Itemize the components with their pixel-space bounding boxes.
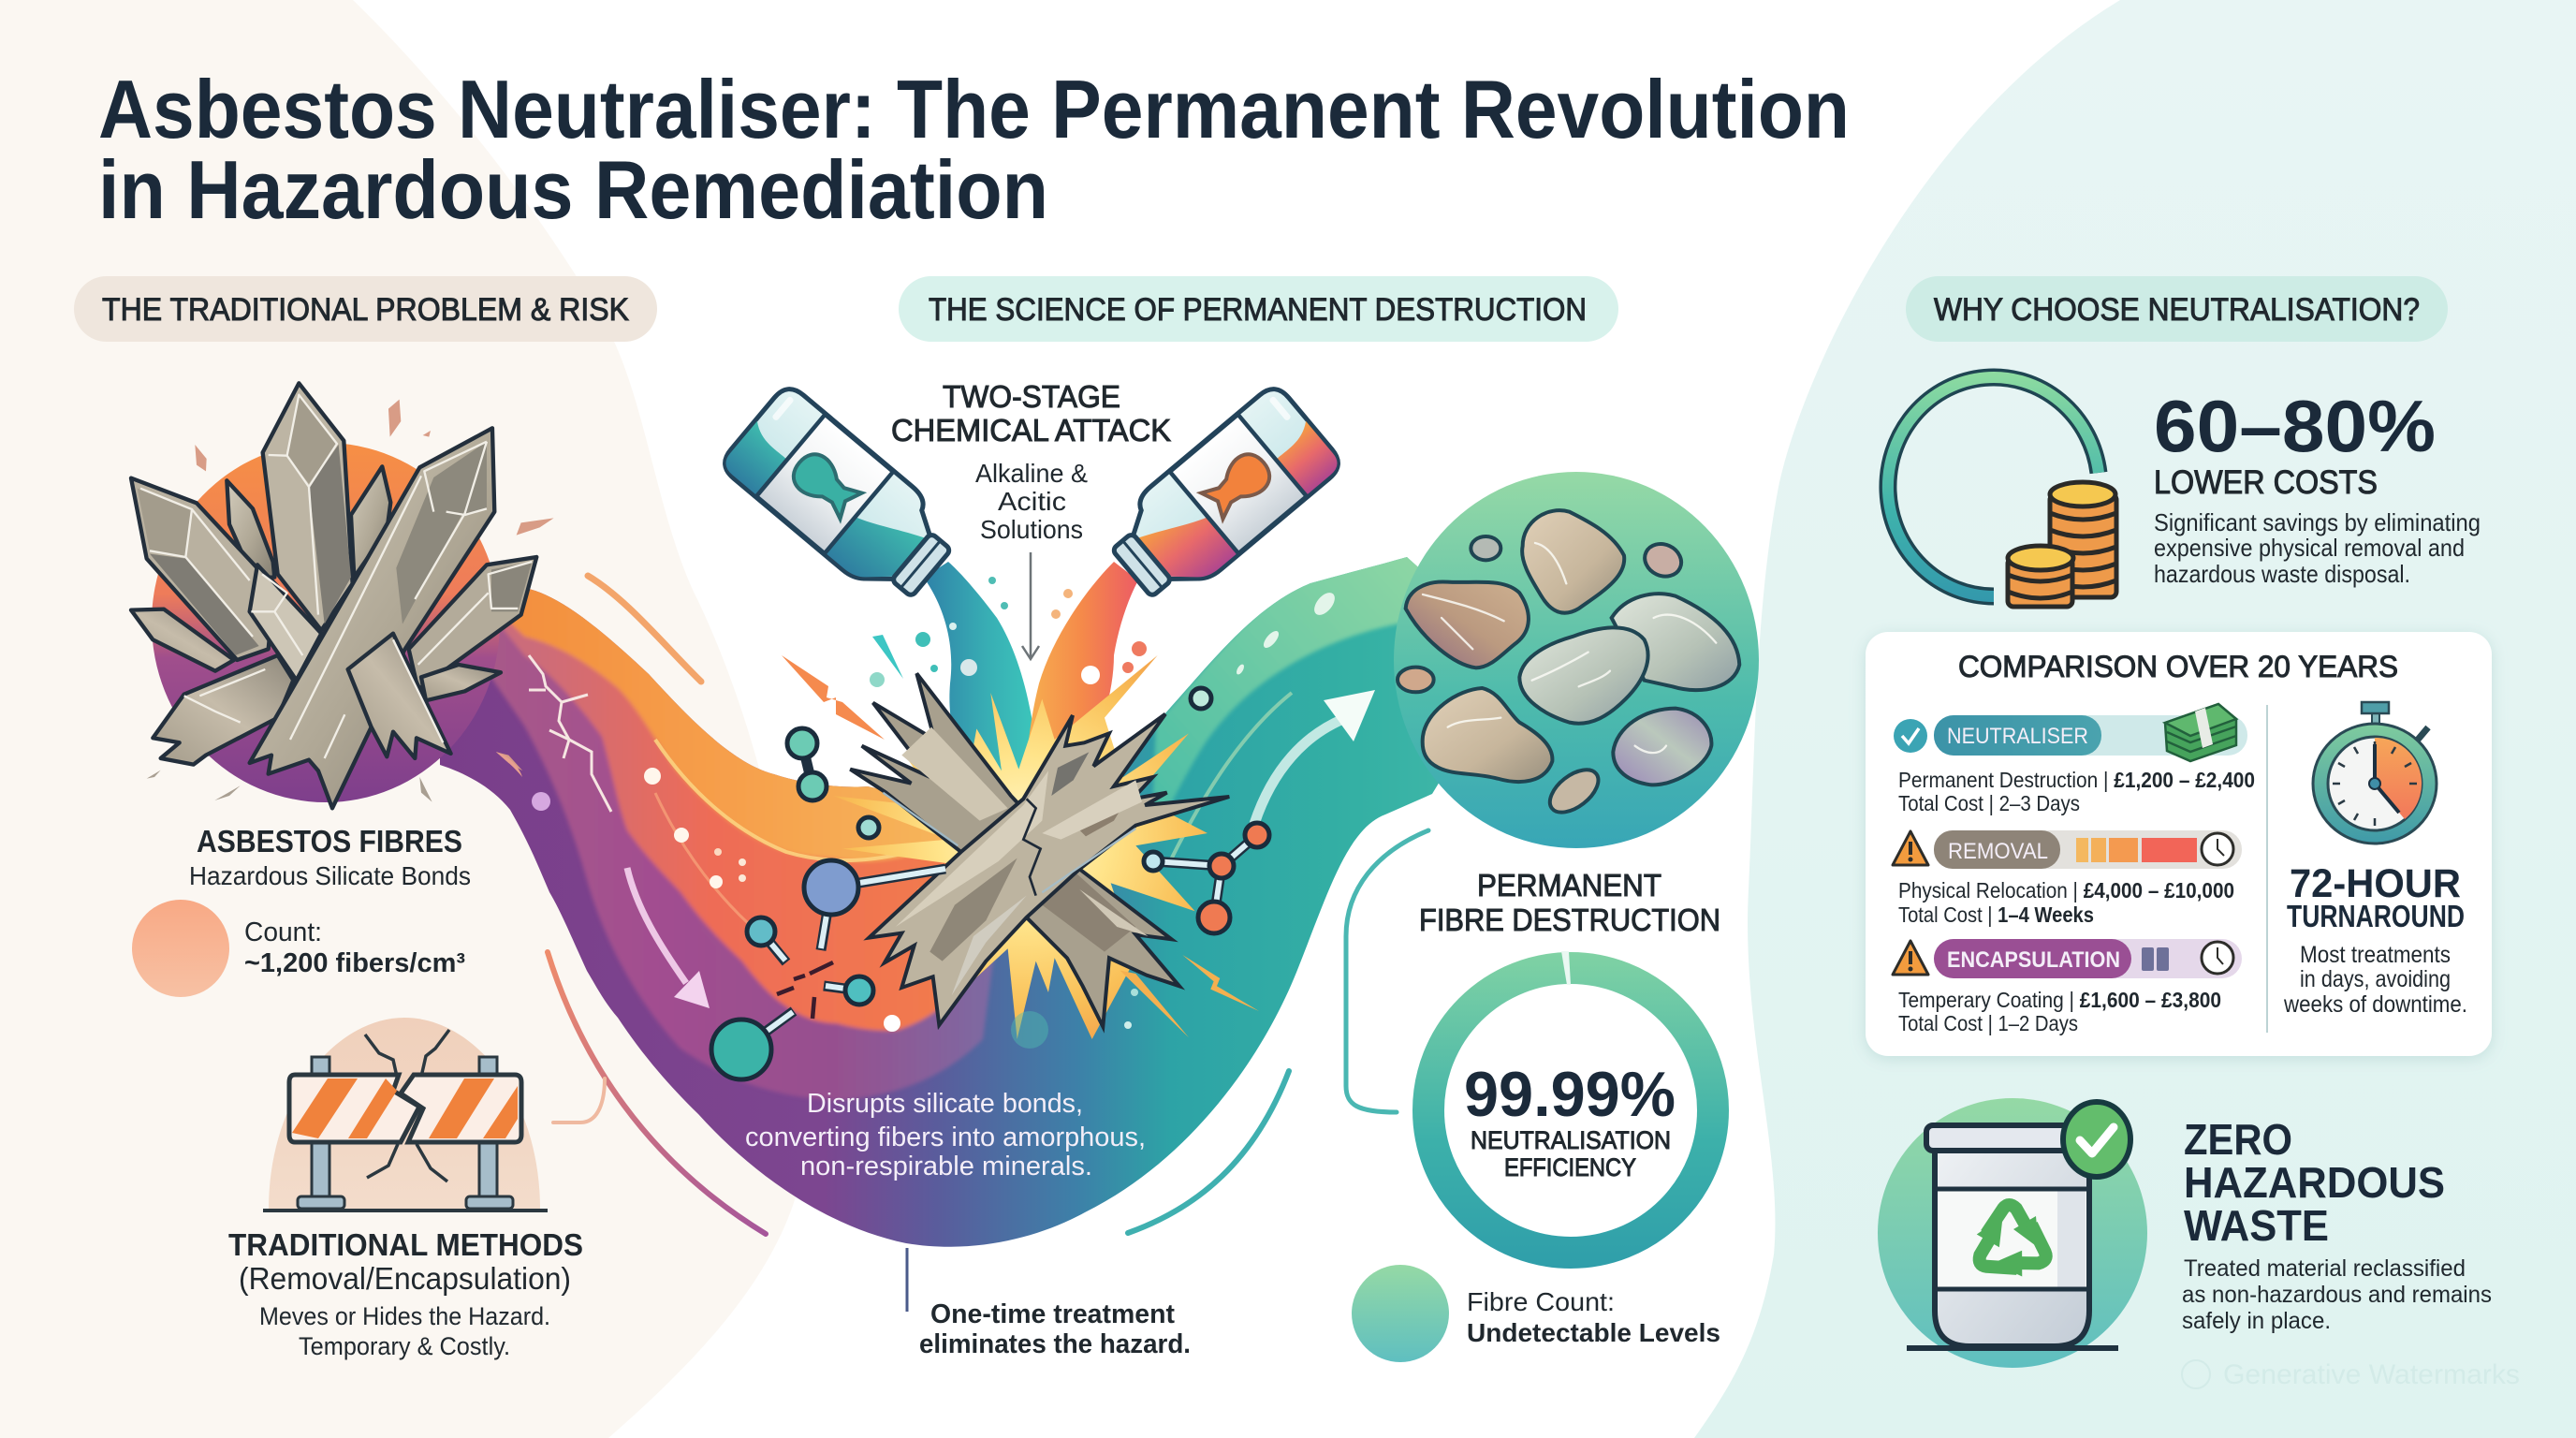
icon: recycled waste jar <box>1878 1098 2147 1368</box>
molecule bonds <box>741 743 1257 1049</box>
donut: 99.99% efficiency: NEUTRALISATION <box>1471 1126 1671 1154</box>
flowing ribbon <box>440 557 1439 1247</box>
callout: one-time treatment: eliminates the hazard. <box>919 1329 1191 1359</box>
row: removal <box>1893 830 2242 927</box>
stat: zero hazardous waste: ZERO <box>2184 1115 2292 1164</box>
text: ribbon description <box>745 1089 1146 1181</box>
arrow: ribbon to pebbles <box>1170 589 1375 861</box>
stat: zero hazardous waste: safely in place. <box>2182 1308 2331 1334</box>
icon: shattered fibres <box>850 673 1229 1027</box>
heading pill: traditional problem <box>74 276 657 342</box>
heading: permanent fibre destruction <box>1419 868 1720 937</box>
row: encapsulation: ENCAPSULATION <box>1947 947 2120 973</box>
text: ribbon description: converting fibers into amorphous, <box>745 1123 1146 1152</box>
callout: fibre count undetectable: Fibre Count: <box>1467 1287 1615 1316</box>
donut: 99.99% efficiency <box>1428 951 1713 1253</box>
row: neutraliser: Total Cost | 2–3 Days <box>1898 791 2080 815</box>
text: traditional methods <box>228 1227 583 1360</box>
row: encapsulation: Total Cost | 1–2 Days <box>1898 1011 2078 1035</box>
heading pill: why choose <box>1906 276 2448 342</box>
heading pill: science: THE SCIENCE OF PERMANENT DESTRUCTION <box>929 292 1587 328</box>
pebble: centre grey <box>1519 627 1648 724</box>
stream: orange pour <box>1025 562 1138 777</box>
row: removal: Total Cost | 1–4 Weeks <box>1898 902 2094 927</box>
text: asbestos fibres: ASBESTOS FIBRES <box>197 824 462 858</box>
heading pill: traditional problem: THE TRADITIONAL PROBLEM & RISK <box>102 292 629 328</box>
bond break marks <box>777 962 833 1019</box>
label: two-stage chemical attack: Alkaline & <box>975 459 1088 488</box>
callout: one-time treatment <box>907 1248 1191 1359</box>
text: traditional methods: Meves or Hides the Hazard. <box>259 1302 550 1330</box>
icon: right bottle <box>1097 382 1345 615</box>
watermark: Generative Watermarks <box>2223 1359 2520 1390</box>
lightning and splash marks <box>782 655 885 740</box>
panel: comparison card <box>1866 632 2492 1056</box>
coins: short stack <box>2008 546 2073 607</box>
row: removal: Physical Relocation | £4,000 – £10,000 <box>1898 878 2234 902</box>
decorative accent arcs <box>548 576 1428 1234</box>
stat: 60-80% lower costs: LOWER COSTS <box>2154 464 2378 501</box>
stat: 72-hour turnaround: in days, avoiding <box>2300 966 2451 992</box>
pebble: left <box>1406 581 1529 668</box>
icon: asbestos crystal cluster <box>131 383 554 808</box>
pebble: purple <box>1613 709 1711 785</box>
explosion burst <box>833 655 1259 1039</box>
circle with inert pebbles <box>1394 472 1759 848</box>
stat: 60-80% lower costs: 60–80% <box>2154 385 2436 467</box>
label: two-stage chemical attack: Acitic <box>998 487 1066 516</box>
fibre count callout <box>132 900 465 997</box>
heading pill: science <box>899 276 1618 342</box>
fibre count callout: ~1,200 fibers/cm³ <box>244 948 465 978</box>
stat: 72-hour turnaround: weeks of downtime. <box>2283 991 2467 1018</box>
label: two-stage chemical attack: TWO-STAGE <box>943 379 1120 414</box>
stat: 60-80% lower costs <box>2154 385 2481 588</box>
row: neutraliser: Permanent Destruction | £1,200 – £2,400 <box>1898 768 2255 792</box>
row: neutraliser: NEUTRALISER <box>1947 724 2088 749</box>
icon: left bottle <box>718 382 966 615</box>
stat: 72-hour turnaround: TURNAROUND <box>2287 899 2465 933</box>
stat: zero hazardous waste <box>2182 1115 2492 1334</box>
stat: zero hazardous waste: Treated material reclassified <box>2184 1255 2466 1282</box>
stat: 72-hour turnaround <box>2283 861 2467 1018</box>
row: encapsulation: Temperary Coating | £1,600 – £3,800 <box>1898 988 2221 1012</box>
row: encapsulation <box>1893 939 2242 1035</box>
pebble: right grey <box>1612 594 1739 690</box>
heading: permanent fibre destruction: PERMANENT <box>1477 868 1661 902</box>
stat: 60-80% lower costs: hazardous waste disposal. <box>2154 560 2410 588</box>
stat: 60-80% lower costs: Significant savings by eliminating <box>2154 508 2481 536</box>
molecule atoms <box>711 688 1269 1079</box>
pebble: lower left <box>1423 688 1552 782</box>
stat: zero hazardous waste: HAZARDOUS <box>2184 1158 2445 1207</box>
stat: zero hazardous waste: WASTE <box>2184 1201 2329 1250</box>
stat: zero hazardous waste: as non-hazardous and remains <box>2182 1282 2492 1308</box>
text: asbestos fibres <box>189 824 471 890</box>
icon: broken barrier <box>263 1018 548 1211</box>
callout: fibre count undetectable: Undetectable Levels <box>1467 1318 1720 1347</box>
coins: tall stack <box>2050 482 2116 597</box>
molecules and splash <box>711 577 1269 1079</box>
stat: 72-hour turnaround: 72-HOUR <box>2290 861 2461 906</box>
pebble highlights <box>1423 543 1716 753</box>
text: traditional methods: (Removal/Encapsulation) <box>239 1261 571 1296</box>
icon: recycle symbol <box>1966 1205 2056 1284</box>
label: two-stage chemical attack: CHEMICAL ATTACK <box>891 413 1171 448</box>
text: traditional methods: Temporary & Costly. <box>299 1332 510 1360</box>
stat: 60-80% lower costs: expensive physical removal and <box>2154 534 2465 562</box>
donut: 99.99% efficiency: 99.99% <box>1464 1059 1676 1130</box>
heading pill: why choose: WHY CHOOSE NEUTRALISATION? <box>1934 292 2420 328</box>
ribbon details: cracks, dots, arrow <box>496 655 746 1008</box>
row: removal: REMOVAL <box>1948 839 2048 864</box>
title <box>98 63 1850 236</box>
icon: green check badge <box>2063 1102 2130 1177</box>
text: ribbon description: non-respirable minerals. <box>800 1152 1092 1181</box>
heading: permanent fibre destruction: FIBRE DESTRUCTION <box>1419 902 1720 937</box>
crystal chips <box>147 400 554 802</box>
arrow: solutions downward <box>1022 552 1039 659</box>
text: ribbon description: Disrupts silicate bonds, <box>807 1089 1083 1119</box>
text: traditional methods: TRADITIONAL METHODS <box>228 1227 583 1262</box>
label: two-stage chemical attack: Solutions <box>980 515 1083 544</box>
callout: one-time treatment: One-time treatment <box>930 1299 1175 1329</box>
icon: cost ring and coins <box>1888 377 2116 607</box>
label: two-stage chemical attack <box>891 379 1171 544</box>
title: in Hazardous Remediation <box>98 143 1048 236</box>
stat: 72-hour turnaround: Most treatments <box>2300 942 2451 968</box>
highlight curve <box>655 740 927 860</box>
callout: fibre count undetectable <box>1352 1265 1720 1362</box>
title: Asbestos Neutraliser: The Permanent Revolution <box>98 63 1850 155</box>
pebble: small ones <box>1398 536 1687 821</box>
heading: comparison over 20 years: COMPARISON OVER 20 YEARS <box>1958 650 2398 683</box>
pebble: top <box>1522 510 1624 613</box>
text: asbestos fibres: Hazardous Silicate Bonds <box>189 861 471 890</box>
stream: teal pour <box>924 562 1039 777</box>
icon: stopwatch <box>2313 702 2437 844</box>
fibre count callout: Count: <box>244 917 322 947</box>
row: neutraliser <box>1894 704 2255 815</box>
donut: 99.99% efficiency: EFFICIENCY <box>1504 1153 1636 1181</box>
